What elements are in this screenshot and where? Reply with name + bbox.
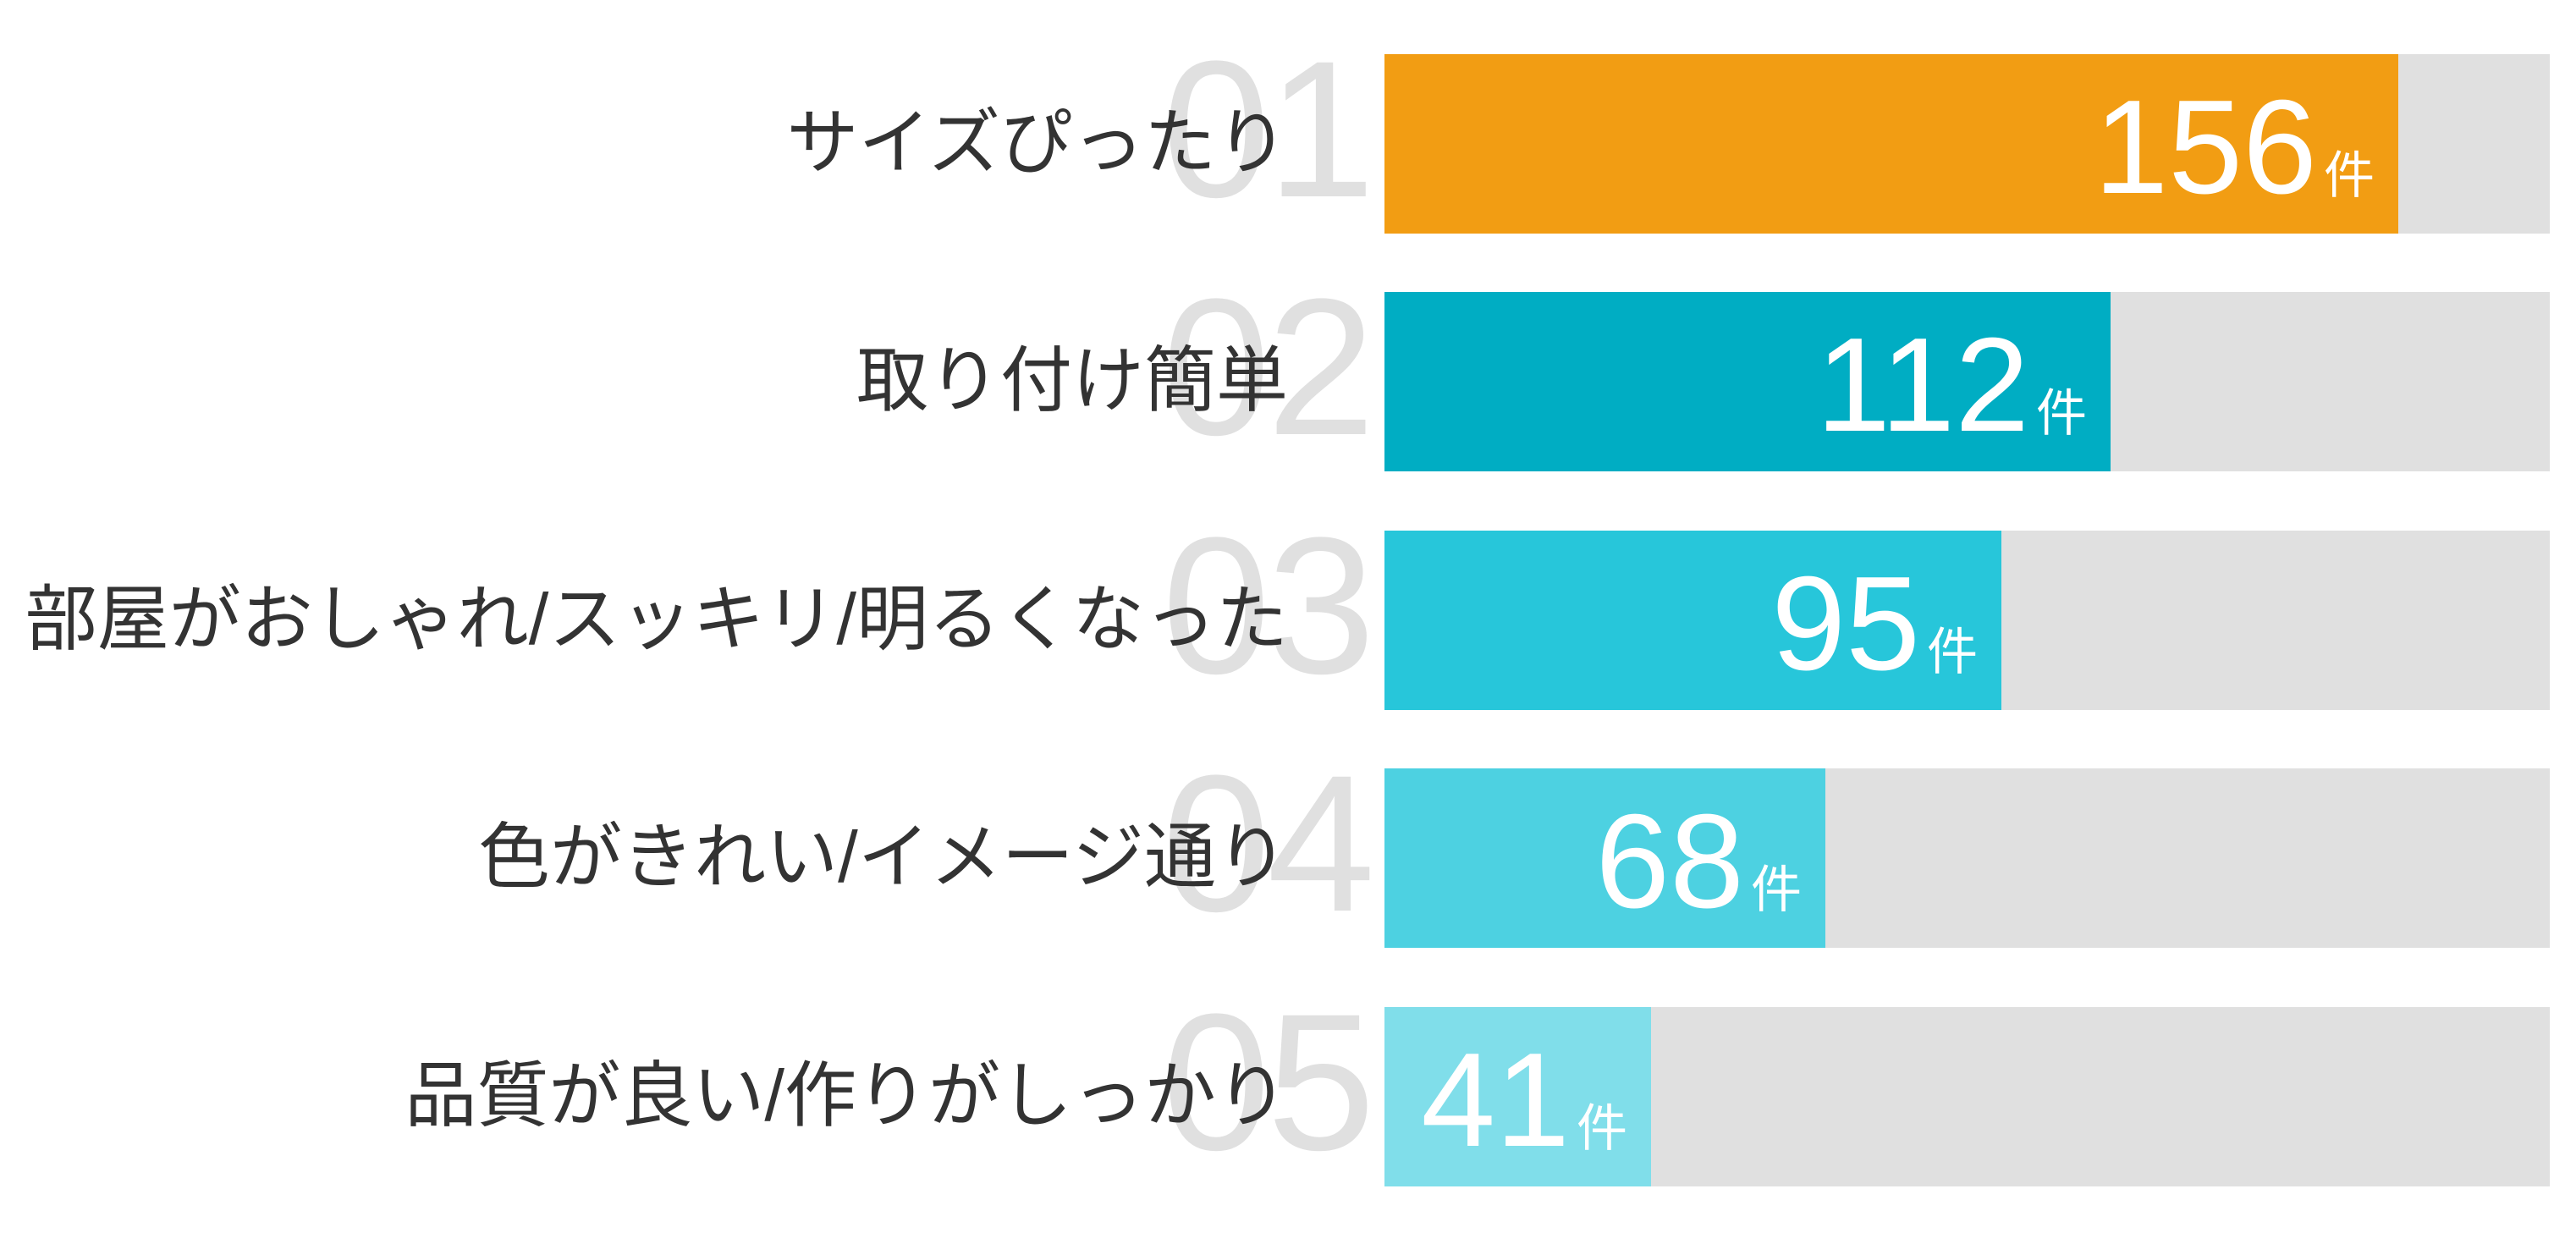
label 3: 部屋がおしゃれ/スッキリ/明るくなった xyxy=(25,580,1288,660)
label 1: サイズぴったり xyxy=(787,103,1288,184)
label 2: 取り付け簡単 xyxy=(856,341,1288,421)
value 1: 件 xyxy=(2324,147,2375,204)
ghost number 03: 03 xyxy=(1162,497,1372,714)
row 5 xyxy=(405,973,2550,1191)
value 3: 件 xyxy=(1927,624,1978,680)
row 3 xyxy=(25,497,2550,714)
label 5: 品質が良い/作りがしっかり xyxy=(405,1056,1288,1137)
value 4: 件 xyxy=(1751,861,1802,918)
bar track 5 xyxy=(1384,1007,2550,1186)
ghost number 04: 04 xyxy=(1162,735,1372,952)
label 4: 色がきれい/イメージ通り xyxy=(478,817,1288,898)
bar 2 xyxy=(1384,292,2111,471)
value 3: 95 xyxy=(1771,549,1920,698)
bar 5 xyxy=(1384,1007,1651,1186)
ghost number 02: 02 xyxy=(1162,258,1372,476)
bar 3 xyxy=(1384,531,2001,710)
value 2: 件 xyxy=(2036,385,2087,442)
ghost number 01: 01 xyxy=(1162,20,1372,238)
value 2: 112 xyxy=(1816,311,2029,460)
value 1: 156 xyxy=(2094,73,2317,222)
row 4 xyxy=(478,735,2550,952)
value 5: 件 xyxy=(1577,1100,1627,1157)
row 2 xyxy=(856,258,2550,476)
bar track 3 xyxy=(1384,531,2550,710)
bar 4 xyxy=(1384,768,1825,948)
bar track 1 xyxy=(1384,54,2550,234)
bar 1 xyxy=(1384,54,2398,234)
row 1 xyxy=(787,20,2550,238)
ghost number 05: 05 xyxy=(1162,973,1372,1191)
value 5: 41 xyxy=(1421,1026,1570,1175)
bar track 4 xyxy=(1384,768,2550,948)
value 4: 68 xyxy=(1595,787,1744,936)
bar track 2 xyxy=(1384,292,2550,471)
